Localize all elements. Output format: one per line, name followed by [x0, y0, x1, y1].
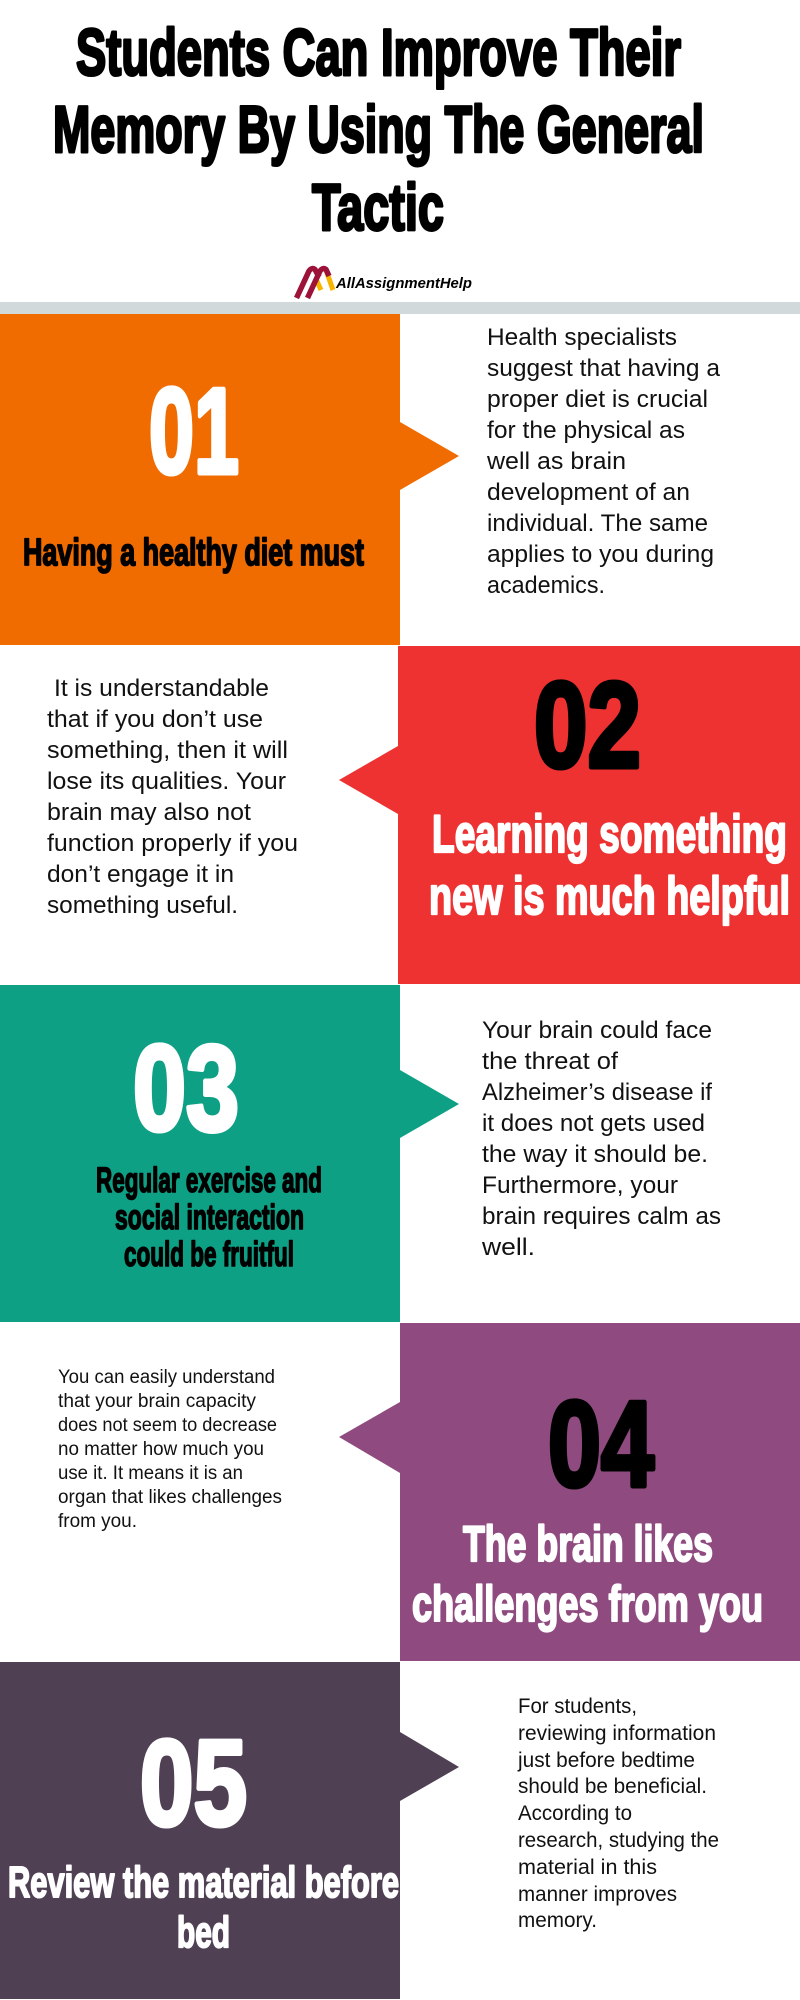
body text 03: brain requires calm as	[482, 1203, 721, 1230]
body text 03: Your brain could face	[482, 1017, 712, 1044]
body text 01: development of an	[487, 479, 690, 506]
heading 03: could be fruitful	[124, 1235, 294, 1274]
green block with arrow	[0, 985, 459, 1322]
body text 02: brain may also not	[47, 799, 251, 826]
body text 01: for the physical as	[487, 417, 685, 444]
heading 02	[429, 805, 790, 926]
number 01: 01	[149, 363, 239, 499]
body text 04: from you.	[58, 1511, 137, 1532]
body text 05	[517, 1695, 719, 1932]
body text 02: something, then it will	[47, 737, 288, 764]
red block with arrow	[339, 646, 800, 984]
body text 01: suggest that having a	[487, 355, 721, 382]
body text 04: use it. It means it is an	[58, 1463, 243, 1484]
body text 03: well.	[481, 1234, 535, 1261]
body text 05: memory.	[518, 1909, 597, 1932]
body text 01: well as brain	[486, 448, 626, 475]
heading 01: Having a healthy diet must	[23, 532, 364, 574]
body text 04: does not seem to decrease	[58, 1415, 277, 1436]
body text 03	[481, 1017, 721, 1261]
body text 01: academics.	[487, 572, 605, 599]
body text 02: something useful.	[47, 892, 238, 919]
body text 01: individual. The same	[487, 510, 708, 537]
body text 02: lose its qualities. Your	[47, 768, 286, 795]
body text 05: For students,	[518, 1695, 637, 1718]
body text 05: research, studying the	[518, 1829, 719, 1852]
body text 05: material in this	[518, 1856, 657, 1879]
logo: AllAssignmentHelp	[296, 269, 472, 298]
body text 03: Alzheimer’s disease if	[482, 1079, 712, 1106]
heading 03: social interaction	[115, 1198, 304, 1237]
body text 04: no matter how much you	[58, 1439, 264, 1460]
body text 01: applies to you during	[487, 541, 714, 568]
panel: step 05	[0, 1662, 719, 1999]
body text 01: proper diet is crucial	[487, 386, 708, 413]
number 03: 03	[133, 1020, 239, 1156]
divider bar	[0, 302, 800, 314]
heading 05: Review the material before	[8, 1858, 399, 1907]
body text 05: just before bedtime	[517, 1749, 695, 1772]
number 02: 02	[534, 657, 641, 793]
title: Tactic	[312, 170, 444, 244]
body text 03: it does not gets used	[482, 1110, 705, 1137]
logo: AllAssignmentHelp: AllAssignmentHelp	[335, 275, 472, 292]
body text 02: function properly if you	[47, 830, 298, 857]
body text 04: that your brain capacity	[58, 1391, 256, 1412]
heading 03	[96, 1161, 322, 1274]
body text 02	[47, 675, 298, 919]
heading 04	[412, 1516, 763, 1632]
body text 01	[486, 324, 721, 599]
panel: step 04	[58, 1323, 800, 1661]
panel: step 03	[0, 985, 721, 1322]
body text 05: manner improves	[518, 1883, 677, 1906]
body text 03: the way it should be.	[482, 1141, 708, 1168]
panel: step 01	[0, 314, 721, 645]
panel: step 02	[47, 646, 800, 984]
body text 05: According to	[518, 1802, 632, 1825]
body text 01: Health specialists	[487, 324, 677, 351]
body text 03: the threat of	[482, 1048, 618, 1075]
body text 02: that if you don’t use	[47, 706, 263, 733]
body text 04: organ that likes challenges	[58, 1487, 282, 1508]
orange block with arrow	[0, 314, 459, 645]
body text 04	[58, 1367, 282, 1532]
title	[53, 15, 704, 244]
number 04: 04	[548, 1376, 654, 1512]
body text 05: reviewing information	[518, 1722, 716, 1745]
heading 03: Regular exercise and	[96, 1161, 322, 1200]
heading 05	[8, 1858, 399, 1957]
heading 05: bed	[177, 1908, 230, 1957]
body text 04: You can easily understand	[58, 1367, 275, 1388]
purple block with arrow	[339, 1323, 800, 1661]
body text 03: Furthermore, your	[482, 1172, 678, 1199]
dark block with arrow	[0, 1662, 459, 1999]
body text 02: don’t engage it in	[47, 861, 234, 888]
body text 05: should be beneficial.	[518, 1775, 707, 1798]
body text 02: It is understandable	[54, 675, 269, 702]
number 05: 05	[140, 1715, 247, 1851]
